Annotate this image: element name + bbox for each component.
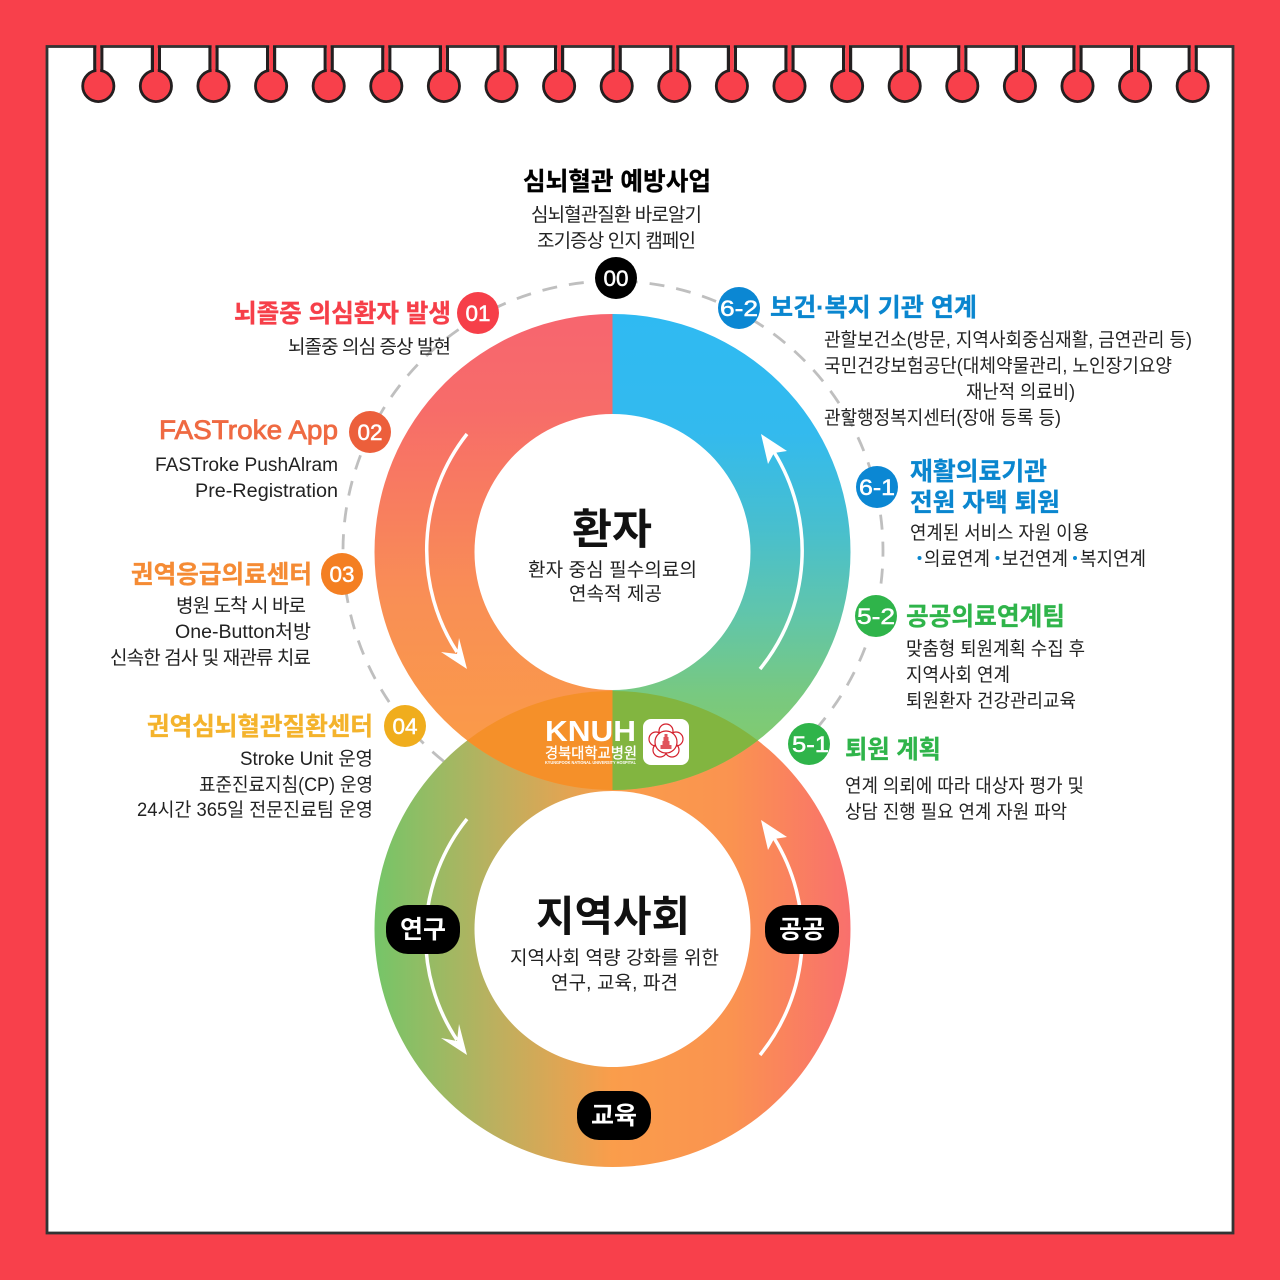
badge 04: 04 — [392, 714, 418, 739]
description: 퇴원환자 건강관리교육 — [906, 690, 1076, 712]
badge 02: 02 — [358, 420, 382, 445]
badge 00: 00 — [604, 266, 628, 291]
upper ring left half: patient — [375, 314, 612, 790]
step 00: prevention — [523, 168, 711, 299]
description — [906, 638, 1085, 712]
description: 지역사회 역량 강화를 위한 — [510, 947, 719, 969]
logo Korean name: 경북대학교병원 — [545, 745, 637, 762]
description: One-Button처방 — [175, 621, 311, 643]
description — [137, 748, 373, 821]
logo emblem — [643, 719, 689, 765]
step 04: cardio-cerebrovascular center — [137, 705, 426, 821]
step 6-1: rehabilitation and home discharge — [856, 458, 1146, 570]
pill: education: 교육 — [591, 1102, 637, 1130]
heading: FASTroke App — [159, 415, 338, 445]
badge 6-1: 6-1 — [859, 475, 895, 500]
dashed pathway arc — [343, 281, 883, 761]
heading: 심뇌혈관 예방사업 — [523, 168, 711, 196]
badge 03: 03 — [330, 562, 354, 587]
description: Pre-Registration — [195, 481, 338, 502]
description: 연계된 서비스 자원 이용 — [910, 522, 1089, 544]
heading — [910, 458, 1060, 517]
step 01: suspected stroke — [234, 292, 499, 358]
badge 5-1 — [788, 723, 830, 765]
description: 관할행정복지센터(장애 등록 등) — [824, 407, 1061, 429]
overlap lens right — [612, 691, 758, 790]
pill: public: 공공 — [779, 916, 825, 944]
badge 6-1 — [856, 466, 898, 508]
badge 5-2: 5-2 — [857, 604, 895, 629]
step 02: FASTroke App — [155, 411, 391, 502]
spiral binding holes — [83, 44, 1208, 102]
description: 연속적 제공 — [569, 583, 662, 605]
arrow: lower left — [426, 819, 467, 1055]
step 5-2: public medical liaison team — [855, 595, 1085, 712]
description — [528, 559, 697, 605]
heading: 뇌졸중 의심환자 발생 — [234, 300, 451, 328]
description — [531, 204, 702, 252]
description: 국민건강보험공단(대체약물관리, 노인장기요양 — [824, 355, 1172, 377]
badge 01 — [457, 292, 499, 334]
description: 심뇌혈관질환 바로알기 — [531, 204, 702, 226]
logo English name: KYUNGPOOK NATIONAL UNIVERSITY HOSPITAL — [545, 760, 636, 765]
description — [845, 775, 1084, 823]
description: 뇌졸중 의심 증상 발현 — [288, 336, 451, 358]
description — [110, 595, 311, 669]
overlap lens left — [467, 691, 612, 790]
description: 환자 중심 필수의료의 — [528, 559, 697, 581]
badge 6-2 — [718, 287, 760, 329]
pill: public — [765, 905, 839, 954]
description: 표준진료지침(CP) 운영 — [199, 774, 373, 796]
description: 병원 도착 시 바로 — [176, 595, 306, 617]
description: 관할보건소(방문, 지역사회중심재활, 금연관리 등) — [824, 329, 1192, 351]
heading: 퇴원 계획 — [845, 736, 941, 764]
arrow: upper right — [760, 434, 802, 669]
description: 맞춤형 퇴원계획 수집 후 — [906, 638, 1085, 660]
lower ring: community — [374, 691, 850, 1167]
description: 재난적 의료비) — [966, 381, 1075, 403]
description: 연계 의뢰에 따라 대상자 평가 및 — [845, 775, 1084, 797]
description: Stroke Unit 운영 — [240, 748, 373, 770]
logo wordmark: KNUH — [545, 716, 636, 748]
logo: KNUH — [545, 716, 689, 765]
heading: 지역사회 — [536, 893, 690, 940]
description: 조기증상 인지 캠페인 — [537, 230, 696, 252]
step 5-1: discharge plan — [788, 723, 1084, 823]
badge 04 — [384, 705, 426, 747]
heading: 전원 자택 퇴원 — [910, 489, 1060, 517]
heading: 권역심뇌혈관질환센터 — [147, 713, 373, 741]
description — [155, 455, 338, 502]
arrow: upper left — [427, 434, 467, 669]
upper ring right half: patient — [612, 314, 850, 790]
arrow: lower right — [760, 820, 802, 1055]
heading: 권역응급의료센터 — [131, 561, 312, 589]
description — [910, 522, 1146, 570]
badge 5-1: 5-1 — [792, 732, 829, 757]
description: 24시간 365일 전문진료팀 운영 — [137, 799, 373, 821]
center text: community — [510, 893, 719, 994]
badge 5-2 — [855, 595, 897, 637]
badge 03 — [321, 553, 363, 595]
description: 신속한 검사 및 재관류 치료 — [110, 647, 311, 669]
description: 지역사회 연계 — [906, 664, 1010, 686]
pill: research: 연구 — [400, 916, 446, 944]
center text: patient — [528, 506, 697, 605]
heading: 환자 — [572, 506, 652, 553]
step 03: emergency center — [110, 553, 363, 669]
description: 보건연계 — [1002, 548, 1068, 570]
pill: research — [386, 905, 460, 954]
description — [824, 329, 1192, 429]
heading: 공공의료연계팀 — [906, 603, 1065, 631]
heading: 보건·복지 기관 연계 — [770, 294, 977, 322]
figure-eight diagram — [374, 314, 850, 1167]
pill: education — [577, 1091, 651, 1140]
badge 6-2: 6-2 — [720, 296, 758, 321]
description: 상담 진행 필요 연계 자원 파악 — [845, 801, 1067, 823]
heading: 재활의료기관 — [910, 458, 1047, 486]
description: 복지연계 — [1080, 548, 1146, 570]
description: 의료연계 — [924, 548, 990, 570]
description: 연구, 교육, 파견 — [551, 972, 678, 994]
step 6-2: health and welfare link — [718, 287, 1192, 429]
description: FASTroke PushAlram — [155, 455, 338, 476]
badge 00 — [595, 257, 637, 299]
description — [510, 947, 719, 994]
badge 01: 01 — [466, 301, 490, 326]
badge 02 — [349, 411, 391, 453]
